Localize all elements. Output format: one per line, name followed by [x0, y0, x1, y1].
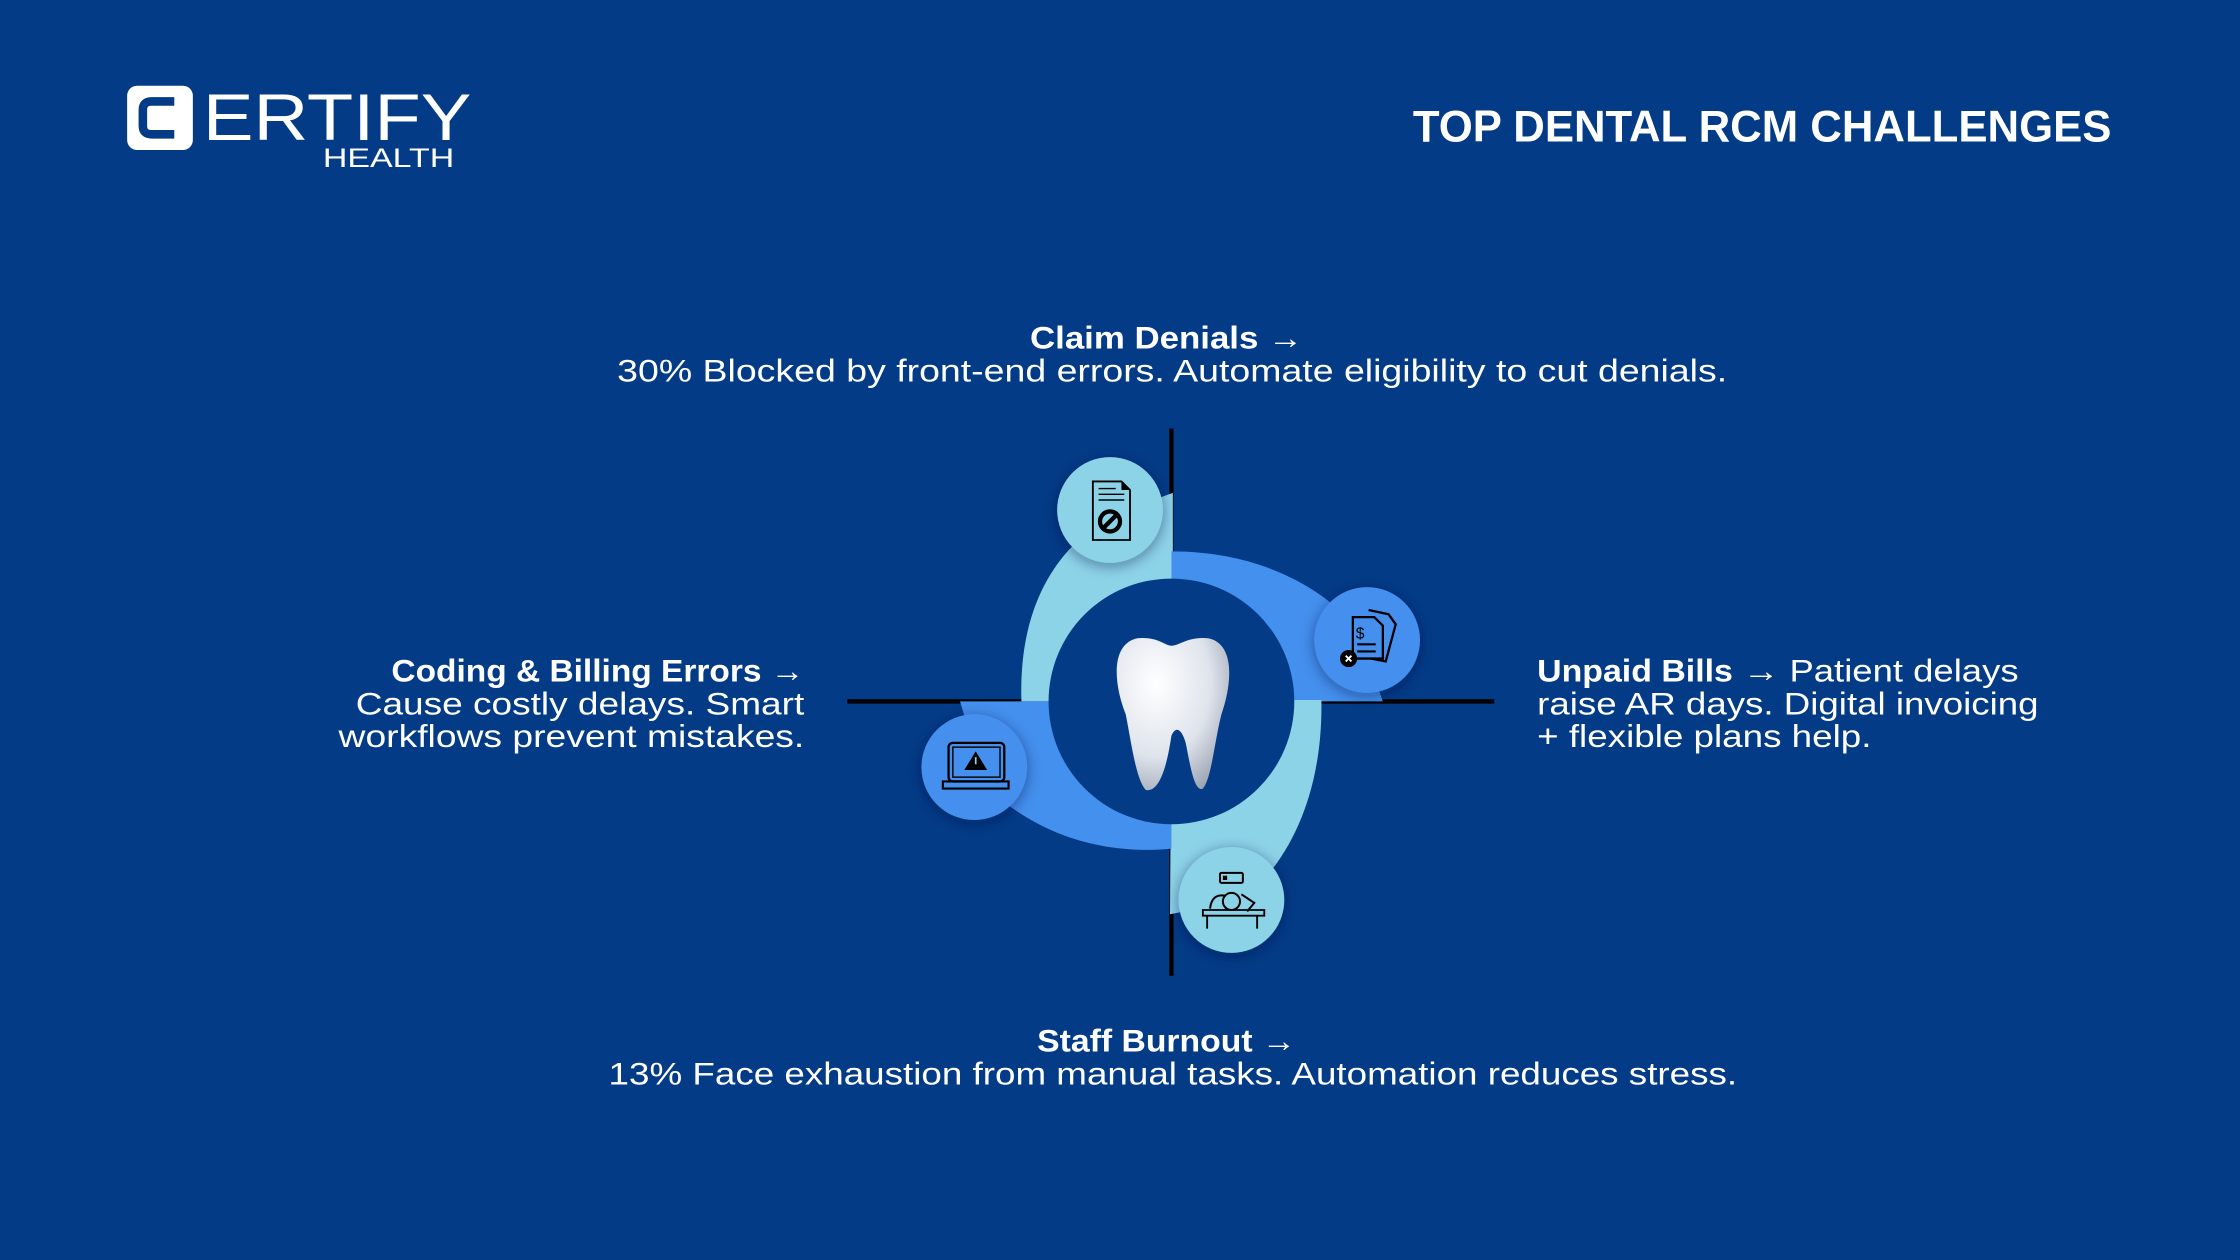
text block: unpaid bills: Unpaid Bills	[1537, 653, 1733, 688]
quadrant: top-right	[1171, 551, 1383, 701]
icon: unpaid bills: $	[1356, 626, 1365, 643]
text block: claim denials	[617, 321, 1727, 388]
text block: coding errors: Cause costly delays. Smart	[356, 686, 805, 721]
quadrant: top-left	[1021, 493, 1173, 701]
icon: unpaid bills	[1314, 587, 1420, 693]
text block: unpaid bills: → Patient delays	[1743, 653, 2019, 688]
title: TOP DENTAL RCM CHALLENGES	[1413, 102, 2111, 151]
text block: claim denials: 30% Blocked by front-end errors. Automate eligibility to cut denials.	[617, 353, 1727, 388]
text block: coding errors	[337, 653, 805, 754]
icon: laptop warning	[921, 714, 1027, 820]
logo	[127, 81, 471, 173]
logo: HEALTH	[323, 142, 454, 173]
text block: coding errors: workflows prevent mistakes.	[337, 719, 804, 754]
text block: staff burnout: Staff Burnout →	[1037, 1023, 1296, 1058]
quadrant: bottom-left	[960, 701, 1171, 850]
logo: ERTIFY	[203, 81, 471, 154]
text block: staff burnout	[609, 1023, 1737, 1091]
icon: claim denial document	[1057, 457, 1163, 563]
text block: unpaid bills: + flexible plans help.	[1537, 719, 1871, 754]
icon: tooth	[1117, 638, 1229, 790]
text block: unpaid bills	[1537, 653, 2039, 754]
diagram	[847, 429, 1494, 976]
inner circle	[1049, 579, 1294, 824]
text block: staff burnout: 13% Face exhaustion from manual tasks. Automation reduces stress.	[609, 1056, 1737, 1091]
text block: claim denials: Claim Denials →	[1030, 321, 1303, 356]
quadrant: bottom-right	[1170, 700, 1321, 914]
text block: unpaid bills: raise AR days. Digital invoicing	[1537, 686, 2039, 721]
icon: staff burnout	[1179, 847, 1284, 953]
text block: coding errors: Coding & Billing Errors →	[391, 653, 804, 688]
